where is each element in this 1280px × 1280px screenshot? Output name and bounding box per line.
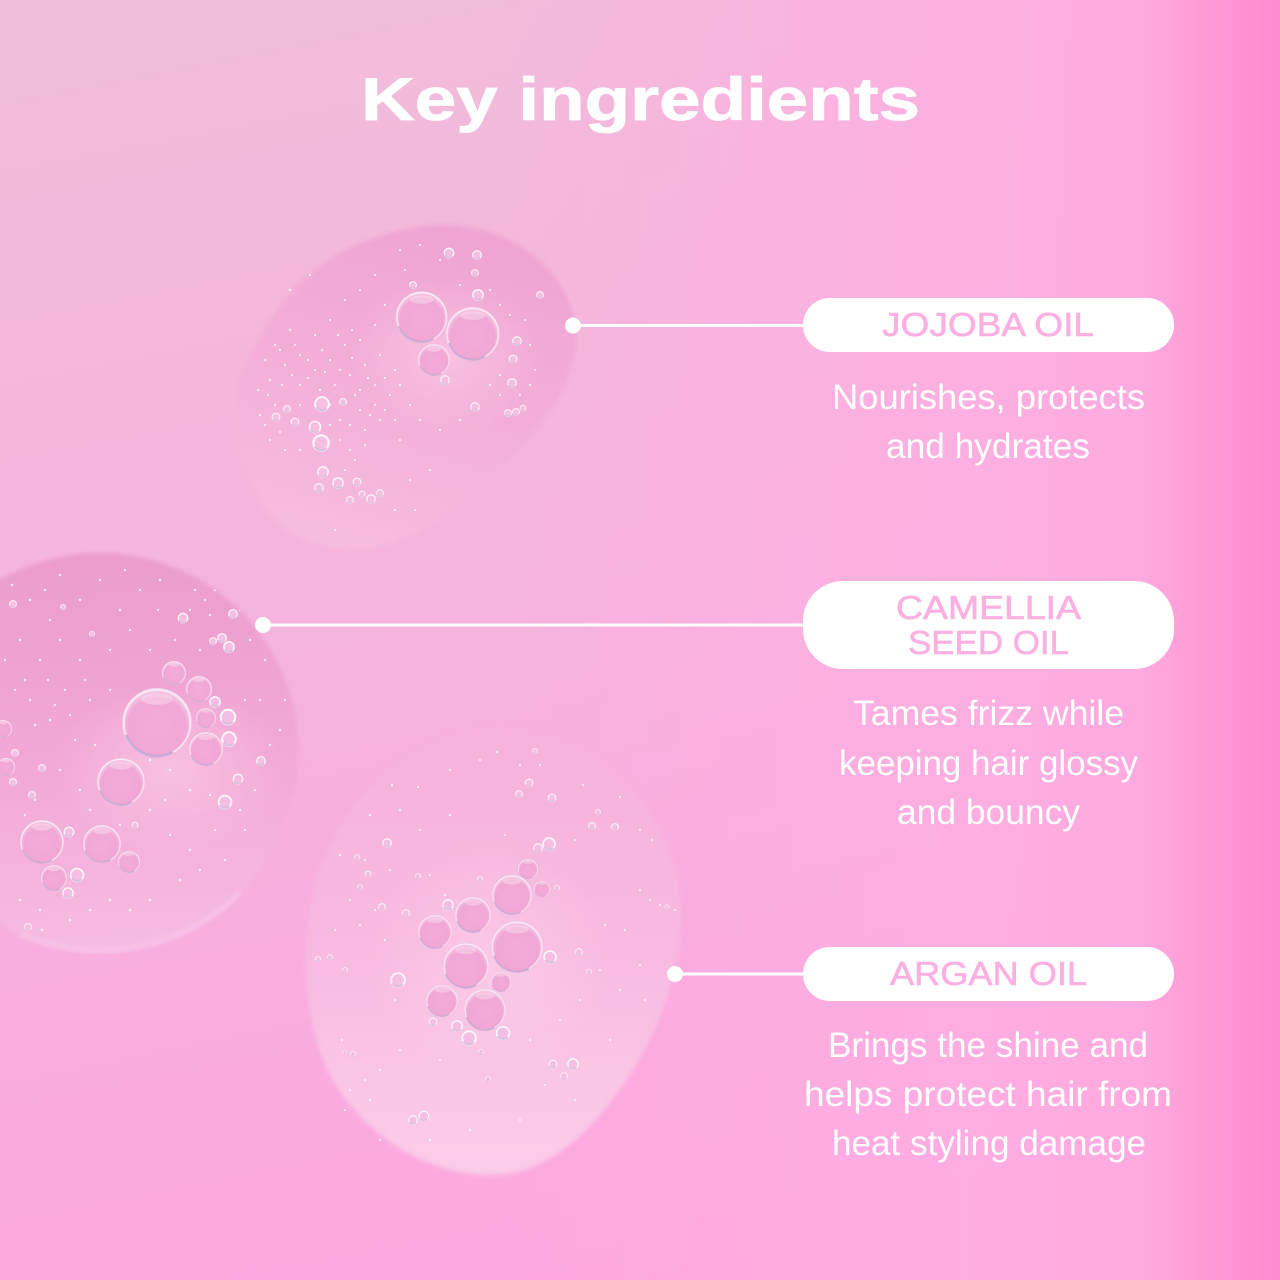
description: camellia seed oil: and bouncy <box>897 793 1081 832</box>
bubbles: argan <box>315 748 670 1125</box>
title: Key ingredients <box>361 66 920 133</box>
description: jojoba oil: Nourishes, protects <box>832 378 1145 417</box>
description: argan oil: Brings the shine and <box>828 1026 1148 1065</box>
label: jojoba oil: JOJOBA OIL <box>882 306 1094 343</box>
label: argan oil <box>803 947 1174 1001</box>
description: argan oil <box>804 1026 1172 1163</box>
description: argan oil: helps protect hair from <box>804 1075 1172 1114</box>
oil droplet: jojoba <box>233 225 576 549</box>
oil droplet: camellia seed <box>0 553 299 951</box>
description: jojoba oil <box>832 378 1145 466</box>
label: camellia seed oil: CAMELLIA <box>896 589 1081 626</box>
description: camellia seed oil: Tames frizz while <box>853 694 1124 733</box>
description: argan oil: heat styling damage <box>832 1124 1146 1163</box>
description: camellia seed oil: keeping hair glossy <box>839 744 1138 783</box>
label: jojoba oil <box>803 298 1174 352</box>
bubbles: jojoba <box>272 248 544 504</box>
label: camellia seed oil: SEED OIL <box>908 624 1069 661</box>
bubbles: camellia seed <box>0 600 266 931</box>
description: jojoba oil: and hydrates <box>886 427 1090 466</box>
label: camellia seed oil <box>803 581 1174 669</box>
label: argan oil: ARGAN OIL <box>890 955 1087 992</box>
description: camellia seed oil <box>839 694 1138 832</box>
connector: jojoba <box>565 318 805 334</box>
connector: argan <box>667 966 805 982</box>
connector: camellia seed <box>255 617 805 633</box>
oil droplet: argan <box>306 730 681 1175</box>
